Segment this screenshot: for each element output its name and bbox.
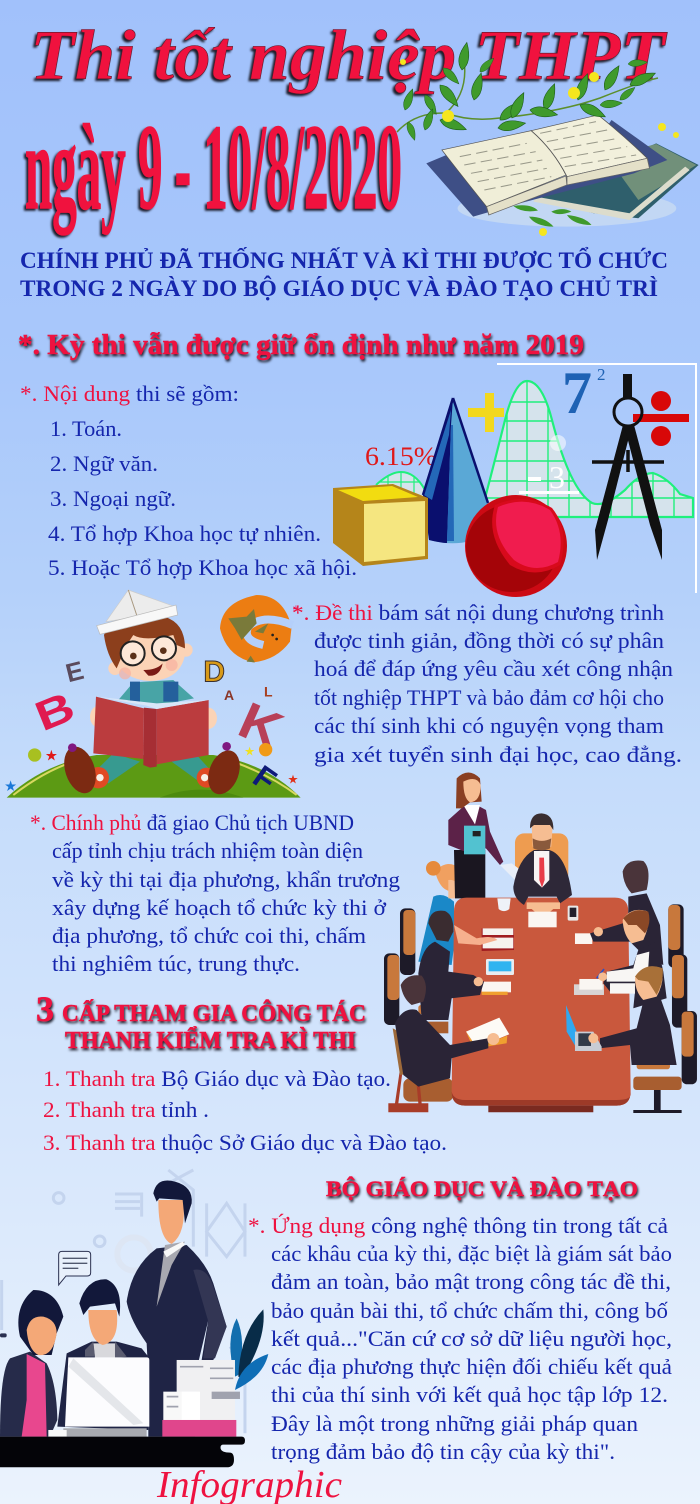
text block: technology application: bảo quản bài thi, tổ chức chấm thi, công bố <box>271 1298 668 1323</box>
illustration: office team <box>0 1170 268 1467</box>
cone <box>423 398 488 543</box>
floating letters: F <box>247 758 283 798</box>
list: inspection levels: 3. Thanh tra thuộc Sở Giáo dục và Đào tạo. <box>43 1130 447 1155</box>
text block: exam subjects: 5. Hoặc Tổ hợp Khoa học xã hội. <box>48 555 357 580</box>
text block: exam subjects: 2. Ngữ văn. <box>50 451 158 476</box>
subtitle: TRONG 2 NGÀY DO BỘ GIÁO DỤC VÀ ĐÀO TẠO CHỦ TRÌ <box>20 276 658 301</box>
section heading: stable exam: *. Kỳ thi vẫn được giữ ổn định như năm 2019 <box>18 329 584 361</box>
heading: ministry of education: BỘ GIÁO DỤC VÀ ĐÀO TẠO <box>326 1176 638 1201</box>
table <box>452 898 631 1112</box>
vine stem <box>397 50 658 132</box>
text block: exam subjects: *. Nội dung thi sẽ gồm: <box>20 381 239 406</box>
floating letters <box>28 655 291 798</box>
subtitle: CHÍNH PHỦ ĐÃ THỐNG NHẤT VÀ KÌ THI ĐƯỢC TỔ CHỨC <box>20 247 668 273</box>
flowers and candies: ★ <box>5 779 17 793</box>
paper stacks <box>162 1360 240 1437</box>
plus sign <box>468 393 504 432</box>
legs and shoes <box>59 743 246 799</box>
list: inspection levels: 2. Thanh tra tỉnh . <box>43 1097 209 1122</box>
flowers and candies: ★ <box>45 749 57 763</box>
sphere <box>465 495 567 597</box>
woman <box>0 1290 63 1437</box>
text block: government assignment: thi nghiêm túc, trung thực. <box>52 951 300 976</box>
text block: exam subjects: 1. Toán. <box>50 416 122 441</box>
hill <box>7 755 301 798</box>
floating letters: E <box>63 655 87 688</box>
text block: technology application: đảm an toàn, bảo mật trong công tác đề thi, <box>271 1269 671 1294</box>
text block: exam subjects: 3. Ngoại ngữ. <box>50 486 176 511</box>
subtitle <box>20 247 668 301</box>
heading: 3 levels of inspection: CẤP THAM GIA CÔNG TÁC <box>62 998 366 1027</box>
standing man <box>127 1181 227 1437</box>
text block: government assignment <box>30 810 400 976</box>
orange G with fish <box>220 595 300 662</box>
text block: technology application: Đây là một trong những giải pháp quan <box>271 1411 638 1436</box>
text block: exam paper: gia xét tuyển sinh đại học, cao đẳng. <box>314 742 682 767</box>
chairs <box>384 833 697 1113</box>
floating letters: K <box>230 691 291 760</box>
compass and divide sign <box>592 374 689 560</box>
list: inspection levels <box>43 1066 447 1155</box>
bell curve chart <box>376 370 700 520</box>
cube <box>333 484 428 566</box>
flowers and candies <box>5 742 298 793</box>
text block: exam paper <box>292 600 682 767</box>
heading: 3 levels of inspection <box>36 989 366 1054</box>
text block: technology application <box>248 1212 672 1464</box>
desk <box>0 1437 245 1467</box>
floating letters: D <box>203 656 225 689</box>
head <box>104 615 193 681</box>
text block: government assignment: địa phương, tổ chức coi thi, chấm <box>52 923 367 948</box>
pale background icons <box>2 1170 245 1433</box>
books <box>426 115 699 227</box>
text block: technology application: thi của thí sinh với kết quả học tập lớp 12. <box>271 1382 668 1407</box>
title line 1: Thi tốt nghiệp THPT <box>30 17 668 95</box>
speech bubble <box>59 1251 91 1285</box>
floating letters: B <box>28 682 81 740</box>
text block: technology application: các khâu của kỳ thi, đặc biệt là giám sát bảo <box>271 1241 672 1266</box>
head man <box>513 813 572 913</box>
minus three <box>519 435 579 495</box>
percent label: 6.15% <box>365 442 437 471</box>
text block: technology application: *. Ứng dụng công nghệ thông tin trong tất cả <box>248 1212 668 1238</box>
text block: exam subjects <box>20 381 357 580</box>
text block: technology application: trọng đảm bảo độ tin cậy của kỳ thi". <box>271 1439 615 1464</box>
seven squared: 2 <box>597 365 606 384</box>
hands <box>90 706 107 727</box>
minus three: 3 <box>549 459 565 495</box>
flowers and candies: ★ <box>288 775 298 786</box>
seated man with laptop <box>57 1279 148 1430</box>
orange G with fish: * <box>293 602 300 617</box>
text block: technology application: các địa phương thực hiện đối chiếu kết quả <box>271 1354 672 1379</box>
back left woman in blue <box>418 861 460 965</box>
seven squared <box>562 360 606 426</box>
white frame <box>497 364 696 593</box>
text block: exam paper: các thí sinh khi có nguyện vọng tham <box>314 713 665 738</box>
laptop <box>48 1357 149 1437</box>
floating letters: A <box>224 687 234 703</box>
illustration: math shapes <box>333 360 700 597</box>
papers, mug, phone, tablet <box>466 898 604 1048</box>
yellow sparkles <box>400 59 679 236</box>
text block: exam paper: được tinh giản, đồng thời có sự phân <box>314 628 664 653</box>
text block: technology application: kết quả..."Căn cứ cơ sở dữ liệu người học, <box>271 1326 672 1351</box>
text block: exam paper: hoá để đáp ứng yêu cầu xét công nhận <box>314 656 673 681</box>
left seated men <box>395 911 499 1087</box>
text block: exam subjects: 4. Tổ hợp Khoa học tự nhiên. <box>48 521 321 546</box>
illustration: open books with vine <box>397 42 699 236</box>
text block: government assignment: về kỳ thi tại địa phương, khẩn trương <box>52 867 400 892</box>
flowers and candies: ★ <box>245 747 255 758</box>
heading: 3 levels of inspection: THANH KIỂM TRA KÌ THI <box>65 1025 356 1054</box>
shirt <box>118 680 194 705</box>
text block: exam paper: tốt nghiệp THPT và bảo đảm cơ hội cho <box>314 685 664 710</box>
heading: 3 levels of inspection: 3 <box>36 989 54 1029</box>
standing woman <box>448 772 527 898</box>
illustration: boy reading <box>5 590 301 799</box>
seven squared: 7 <box>562 360 592 426</box>
plant <box>230 1309 268 1390</box>
red book <box>93 697 209 768</box>
paper hat <box>97 590 178 634</box>
text block: government assignment: *. Chính phủ đã giao Chủ tịch UBND <box>30 810 354 835</box>
right seated men <box>566 861 677 1065</box>
floating letters: L <box>264 684 273 700</box>
text block: government assignment: xây dựng kế hoạch tổ chức kỳ thi ở <box>52 895 387 920</box>
text block: government assignment: cấp tỉnh chịu trách nhiệm toàn diện <box>52 838 363 863</box>
list: inspection levels: 1. Thanh tra Bộ Giáo dục và Đào tạo. <box>43 1066 391 1091</box>
text block: exam paper: *. Đề thi bám sát nội dung chương trình <box>292 600 664 625</box>
illustration: meeting room <box>384 772 697 1113</box>
vine leaves <box>401 42 657 141</box>
